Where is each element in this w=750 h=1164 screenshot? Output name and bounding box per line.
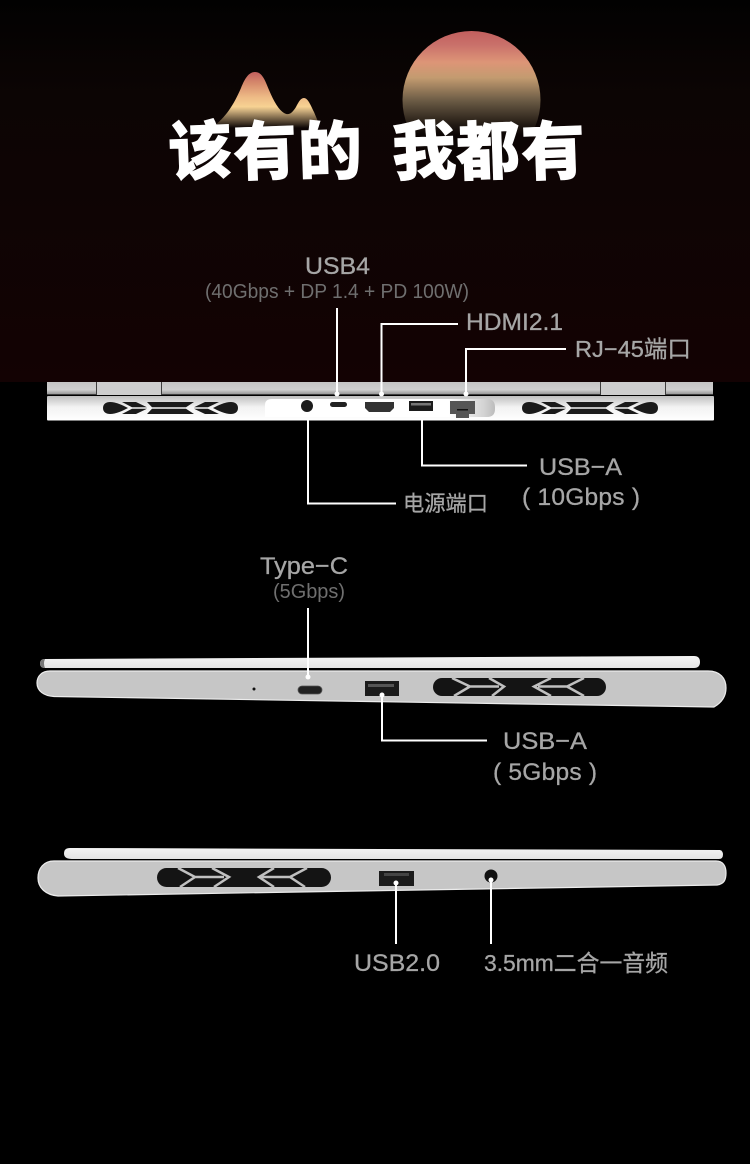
port: USB-A: [379, 871, 414, 886]
leader line: USB2.0: [394, 880, 398, 944]
leader line: USB4: [334, 308, 340, 396]
leader line: audio: [488, 878, 494, 944]
title: 都: [454, 100, 521, 194]
side view: left of laptop: [37, 656, 726, 707]
port: RJ-45: [450, 401, 475, 418]
label: Type-C: (5Gbps): [273, 581, 345, 603]
lid: [40, 656, 700, 668]
label: USB4: [205, 253, 469, 303]
rear view of laptop: [47, 382, 714, 420]
port: HDMI: [365, 402, 394, 412]
rear hinge strip: [47, 382, 713, 395]
label: Type-C: [260, 553, 348, 603]
port: USB-C: [298, 686, 322, 694]
label: power port: 电源端口: [403, 492, 488, 516]
leader line: HDMI: [379, 324, 458, 396]
body: [37, 671, 726, 707]
port: USB4: [330, 402, 347, 407]
port: USB-A: [365, 681, 399, 696]
label: USB-A 10Gbps: USB−A: [539, 454, 623, 481]
label: USB-A 10Gbps: [522, 454, 640, 511]
port: audio jack: [484, 870, 498, 882]
vent: [157, 868, 331, 887]
label: HDMI2.1: HDMI2.1: [466, 309, 563, 336]
leader line: Type-C: [306, 608, 310, 680]
indicator light: [252, 688, 256, 690]
label: USB-A 10Gbps: ( 10Gbps ): [522, 484, 640, 511]
title: 的: [296, 100, 363, 194]
label: USB4: USB4: [305, 253, 370, 280]
lid: [64, 848, 723, 859]
side view: right of laptop: [38, 848, 726, 896]
port: USB-A: [409, 401, 433, 411]
title: 有: [519, 100, 586, 194]
label: USB-A 5Gbps: USB−A: [503, 728, 588, 755]
label: USB4: (40Gbps + DP 1.4 + PD 100W): [205, 281, 469, 303]
label: RJ-45 port: RJ−45端口: [575, 336, 691, 362]
leader line: USB-A rear: [422, 420, 527, 466]
icon: sun: [402, 31, 540, 169]
rear vent right: [522, 402, 658, 414]
port panel: [265, 399, 495, 417]
rear body: [47, 396, 714, 420]
background: dark upper band: [0, 0, 750, 382]
label: audio jack: 3.5mm二合一音频: [484, 950, 668, 976]
rear vent left: [103, 402, 238, 414]
label: USB-A 5Gbps: [493, 728, 597, 786]
vent: [433, 678, 606, 696]
port: power: [301, 400, 313, 412]
leader line: USB-A side: [380, 692, 487, 740]
label: USB2.0: USB2.0: [354, 950, 440, 977]
title: 我: [390, 100, 457, 194]
leader line: power: [308, 420, 396, 504]
title: 有: [231, 100, 298, 194]
title: [166, 100, 586, 194]
icon: mountains: [211, 72, 319, 128]
title: 该: [166, 100, 233, 194]
body: [38, 861, 726, 896]
label: USB-A 5Gbps: ( 5Gbps ): [493, 759, 597, 786]
label: Type-C: Type−C: [260, 553, 348, 580]
leader line: RJ-45: [464, 349, 566, 396]
